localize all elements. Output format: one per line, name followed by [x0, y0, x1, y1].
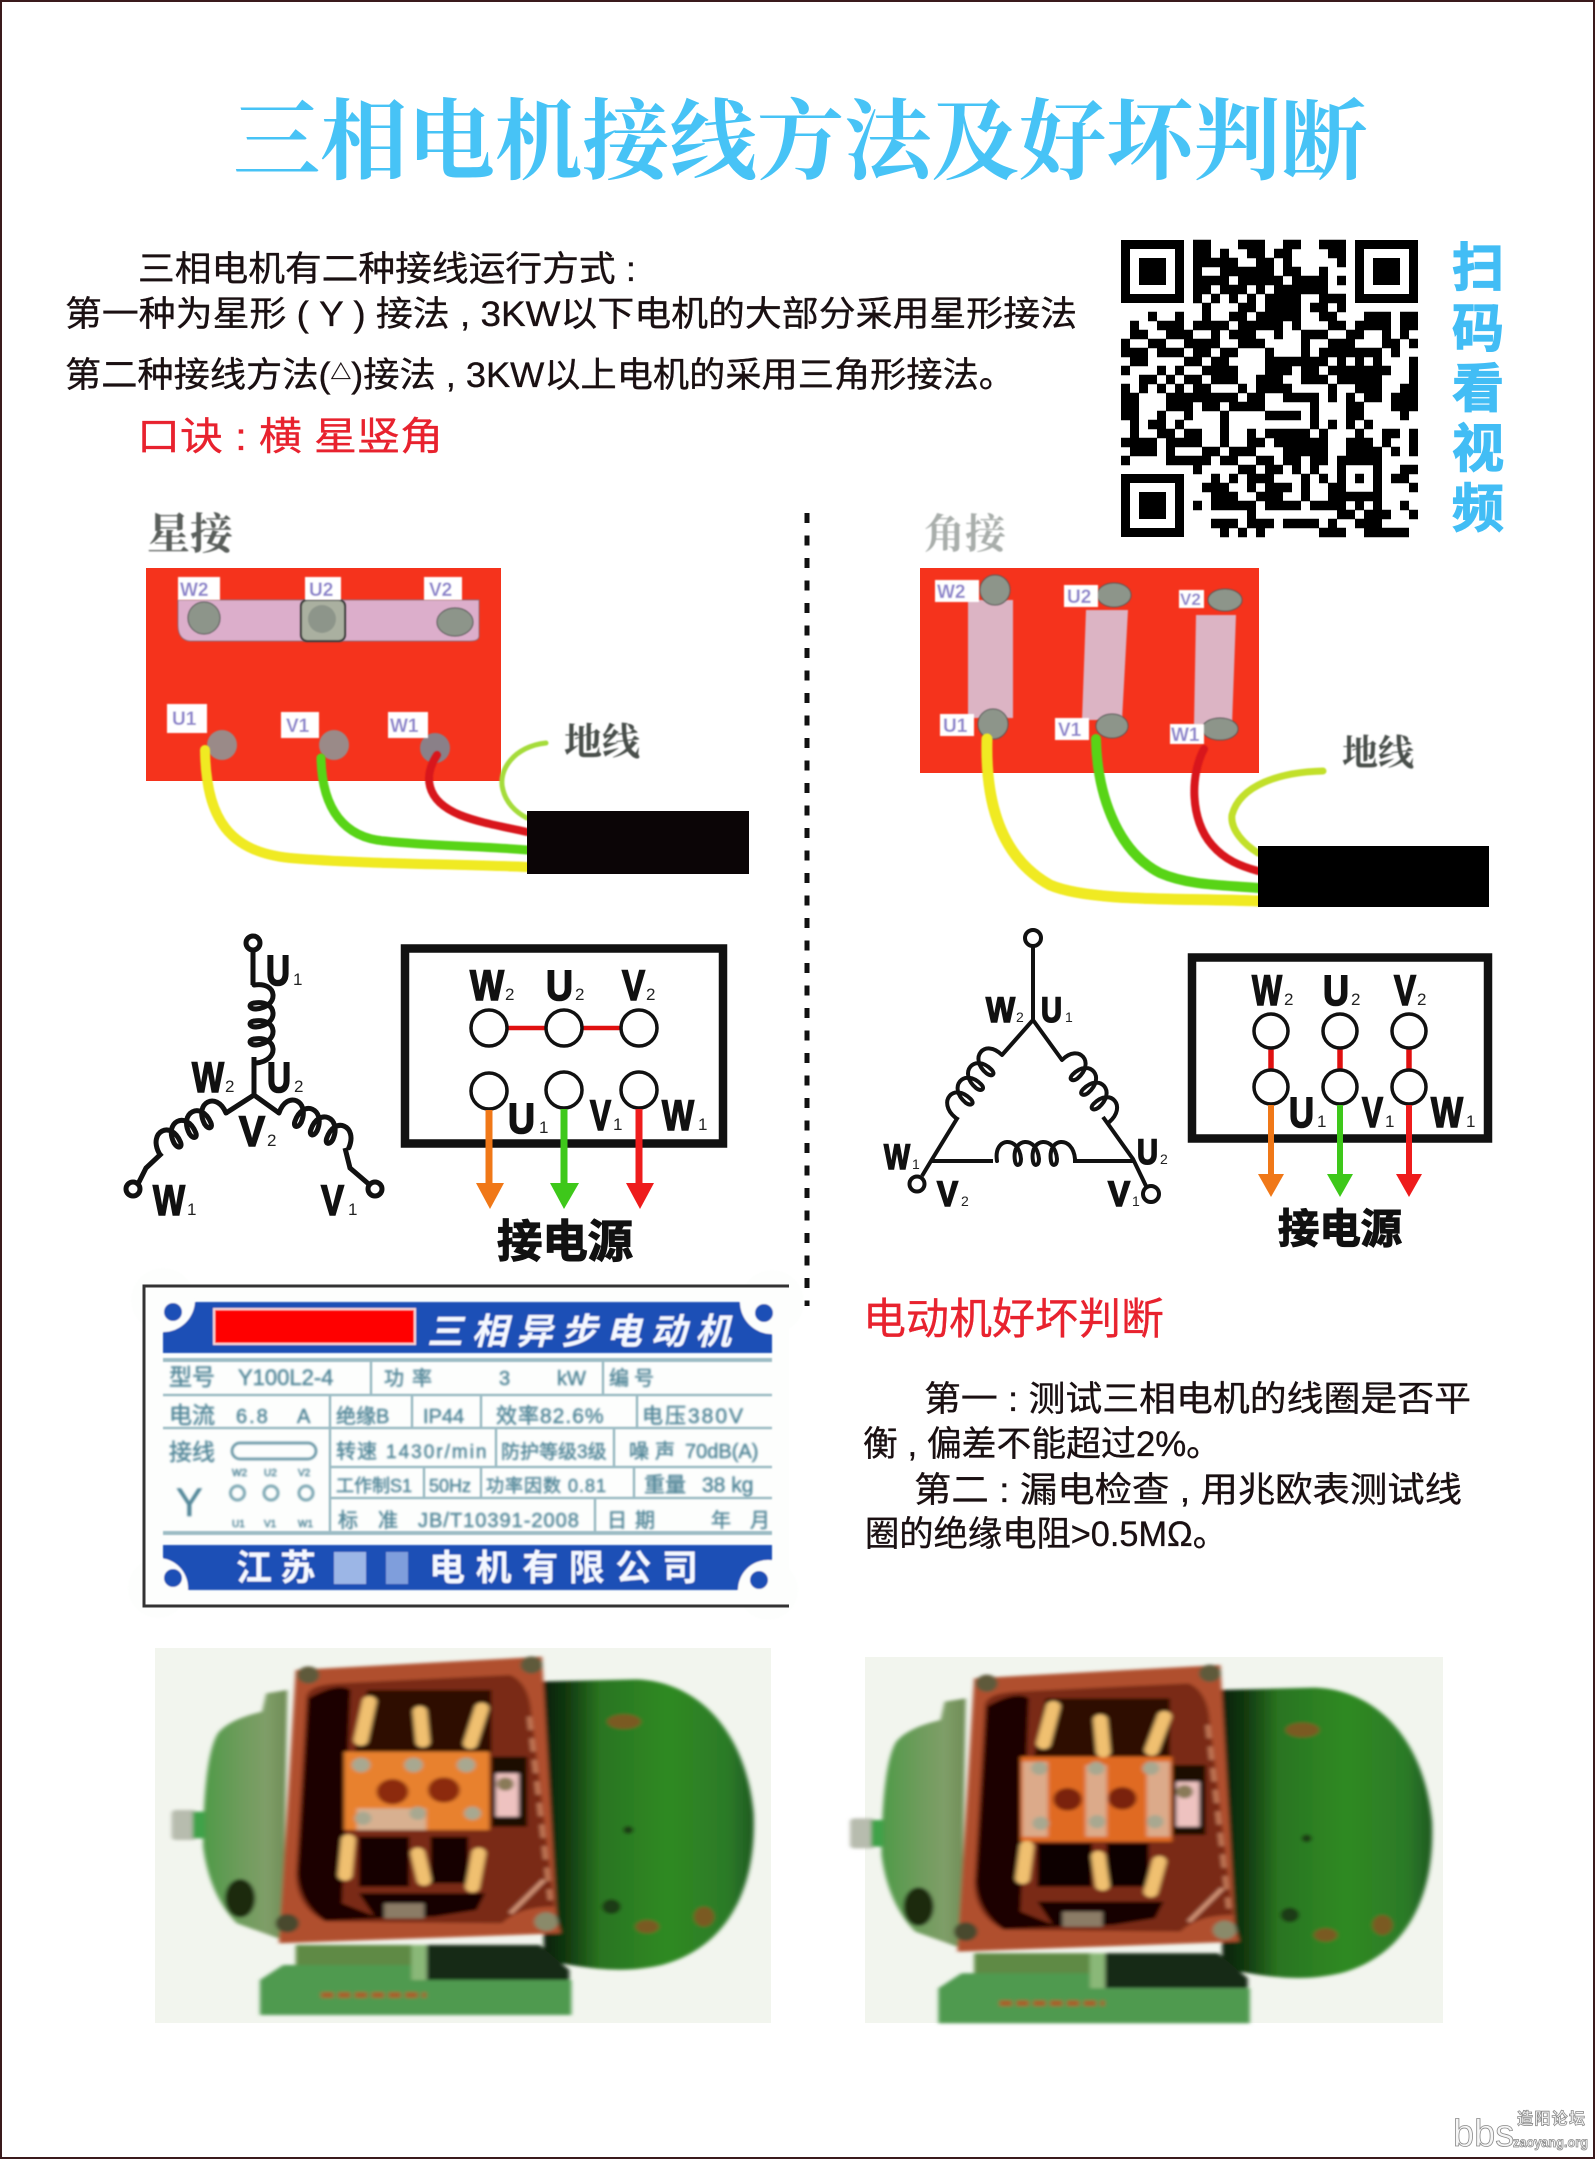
terminal tags: V1	[1058, 720, 1082, 741]
top blue band: 三相异步电动机	[427, 1311, 733, 1352]
photo: motor star wired	[155, 1648, 771, 2023]
spec text: 70dB(A)	[685, 1441, 758, 1463]
terminal tags: V1	[286, 716, 310, 737]
star terminal box diagram	[405, 948, 723, 1267]
dashed divider	[804, 513, 810, 1306]
heading: delta: 角接	[924, 511, 1008, 557]
heading: motor check: 电动机好坏判断	[863, 1296, 1164, 1344]
star winding diagram: W	[192, 1054, 224, 1102]
spec text: 功率因数 0.81	[486, 1476, 607, 1496]
heading: star: 星接	[147, 511, 235, 559]
label: connect power: 接电源	[1278, 1206, 1402, 1252]
spec text: 接线	[169, 1439, 215, 1465]
star terminal box diagram: 2	[505, 985, 514, 1004]
scan prompt vertical text: 频	[1452, 481, 1504, 539]
watermark: zaoyang.org	[1513, 2134, 1588, 2150]
spec text: V2	[298, 1468, 311, 1479]
star terminal box diagram: 1	[613, 1115, 622, 1134]
spec grid	[163, 1360, 772, 1533]
spec text: Y100L2-4	[238, 1365, 333, 1390]
terminal tags: U2	[1067, 587, 1091, 608]
terminal board	[920, 568, 1259, 773]
delta winding diagram: U	[1041, 991, 1062, 1030]
delta winding diagram: 1	[1132, 1193, 1140, 1209]
spec text: Y	[176, 1481, 203, 1525]
delta winding diagram: V	[1108, 1175, 1131, 1214]
spec text: 型号	[169, 1364, 215, 1390]
cable	[527, 811, 749, 874]
star winding diagram: 1	[187, 1200, 196, 1219]
terminal tags: W2	[180, 580, 208, 601]
spec text: W1	[298, 1519, 313, 1530]
motor check text block: 圈的绝缘电阻>0.5MΩ。	[865, 1515, 1227, 1554]
star winding diagram: 1	[348, 1200, 357, 1219]
power arrows	[1258, 1105, 1422, 1197]
spec text: 编号	[609, 1367, 659, 1390]
scan prompt vertical text: 扫	[1452, 240, 1504, 298]
top blue band	[131, 1268, 804, 1353]
watermark	[1453, 2109, 1588, 2155]
spec text: 日期	[607, 1510, 663, 1532]
star terminal box diagram: U	[546, 962, 573, 1010]
spec text: 1430r/min	[386, 1442, 488, 1463]
delta winding diagram: W	[986, 991, 1015, 1030]
spec text: 50Hz	[429, 1476, 471, 1496]
motor check text block: 第一 : 测试三相电机的线圈是否平	[924, 1380, 1471, 1419]
star winding diagram: W	[153, 1177, 185, 1225]
terminal tags: V2	[1180, 590, 1201, 609]
delta terminal box diagram: 1	[1466, 1112, 1475, 1131]
terminal tags: U1	[943, 716, 968, 737]
wires	[987, 739, 1323, 901]
delta terminal box diagram: V	[1362, 1089, 1383, 1137]
delta terminal box diagram	[1192, 958, 1488, 1252]
delta terminal box diagram: 1	[1317, 1112, 1326, 1131]
motor check text block	[863, 1380, 1471, 1554]
mnemonic: 口诀 : 横 星竖角	[137, 416, 443, 459]
spec text: 年	[711, 1509, 731, 1532]
wires	[205, 743, 546, 867]
star terminal box diagram: V	[590, 1092, 611, 1140]
star terminal box diagram: 2	[575, 985, 584, 1004]
cable	[1258, 846, 1489, 907]
delta terminal box diagram: 1	[1385, 1112, 1394, 1131]
delta winding diagram: 1	[1065, 1009, 1073, 1025]
spec text: 工作制S1	[336, 1476, 412, 1496]
scan prompt vertical text: 视	[1452, 421, 1504, 479]
terminal tags: U1	[172, 709, 197, 730]
delta terminal box diagram: 2	[1351, 990, 1360, 1009]
delta winding diagram: U	[1137, 1133, 1158, 1172]
plate frame	[144, 1286, 789, 1606]
delta terminal box diagram: U	[1323, 967, 1349, 1015]
spec text: 38 kg	[702, 1474, 753, 1497]
bottom blue band	[128, 1545, 798, 1620]
spec text: 电流	[169, 1402, 215, 1428]
intro text block: △	[331, 361, 351, 384]
spec text: 电压380V	[642, 1405, 745, 1428]
spec text: 3	[499, 1368, 510, 1390]
spec text: U1	[232, 1519, 245, 1530]
power arrows	[476, 1109, 654, 1209]
star terminal box diagram: U	[508, 1095, 535, 1143]
star winding diagram: 1	[293, 970, 302, 989]
photo: motor delta wired	[850, 1657, 1443, 2023]
delta terminal box diagram: U	[1289, 1089, 1314, 1137]
spec text: U2	[264, 1468, 277, 1479]
terminal tags: U2	[309, 580, 333, 601]
spec text	[169, 1364, 770, 1532]
bottom blue band: 江苏	[236, 1547, 316, 1588]
spec text: 噪声	[629, 1440, 681, 1463]
star terminal box diagram: 1	[698, 1115, 707, 1134]
star winding diagram: U	[266, 947, 290, 995]
star winding diagram: V	[239, 1108, 265, 1156]
link bar	[178, 600, 479, 641]
terminal tags	[935, 580, 1204, 746]
delta winding diagram: W	[884, 1138, 910, 1177]
terminal screws	[978, 575, 1242, 740]
panel: delta connection photo	[920, 511, 1489, 907]
intro text block: 第一种为星形 ( Y ) 接法 , 3KW以下电机的大部分采用星形接法	[65, 295, 1077, 334]
terminal tags: W2	[937, 582, 966, 603]
delta winding diagram: V	[937, 1175, 959, 1214]
spec text: 效率82.6%	[496, 1405, 605, 1428]
scan prompt vertical text: 码	[1452, 301, 1504, 359]
spec text: 绝缘B	[336, 1405, 389, 1428]
motor check text block: 第二 : 漏电检查 , 用兆欧表测试线	[914, 1471, 1462, 1510]
link bars	[968, 600, 1236, 725]
delta winding diagram	[884, 930, 1168, 1214]
label: ground: 地线	[1342, 733, 1414, 773]
label: connect power: 接电源	[497, 1216, 633, 1267]
terminal tags: W1	[1171, 725, 1200, 746]
star winding diagram: 2	[225, 1077, 234, 1096]
title: 三相电机接线方法及好坏判断	[233, 95, 1368, 192]
spec text: A	[297, 1406, 311, 1428]
delta terminal box diagram: V	[1394, 967, 1416, 1015]
terminal tags: V2	[429, 580, 452, 601]
intro text block: 三相电机有二种接线运行方式 :	[138, 250, 636, 289]
delta terminal box diagram: W	[1252, 967, 1282, 1015]
spec text: W2	[232, 1468, 247, 1479]
scan prompt vertical text	[1452, 240, 1504, 539]
star winding diagram: 2	[267, 1131, 276, 1150]
spec text: 6.8	[236, 1406, 270, 1428]
spec text: 功率	[384, 1367, 440, 1390]
star winding diagram	[126, 936, 382, 1225]
label: ground: 地线	[564, 722, 640, 764]
star terminal box diagram: 2	[646, 985, 655, 1004]
spec text: 转速	[336, 1440, 378, 1463]
spec text: 标准	[338, 1509, 418, 1532]
star terminal box diagram: W	[662, 1092, 694, 1140]
panel: star connection photo	[146, 511, 749, 874]
star winding diagram: U	[267, 1054, 291, 1102]
delta winding diagram: 2	[1016, 1009, 1024, 1025]
spec text: JB/T10391-2008	[418, 1510, 580, 1532]
spec text: 防护等级3级	[501, 1441, 607, 1463]
spec text: V1	[264, 1519, 277, 1530]
spec text: 重量	[644, 1474, 686, 1497]
terminal screws	[188, 600, 473, 763]
motor check text block: 衡 , 偏差不能超过2%。	[863, 1425, 1221, 1464]
terminal board	[146, 568, 501, 781]
delta winding diagram: 2	[961, 1193, 969, 1209]
watermark: bbs	[1453, 2113, 1514, 2155]
nameplate	[128, 1268, 804, 1620]
delta terminal box diagram: W	[1431, 1089, 1463, 1137]
intro text block: )接法 , 3KW以上电机的采用三角形接法。	[351, 356, 1015, 395]
intro text block	[65, 250, 1077, 395]
star winding diagram: 2	[294, 1077, 303, 1096]
spec text: IP44	[423, 1406, 464, 1428]
scan prompt vertical text: 看	[1452, 361, 1504, 419]
spec text: kW	[557, 1368, 586, 1390]
delta winding diagram: 2	[1160, 1151, 1168, 1167]
star terminal box diagram: V	[622, 962, 645, 1010]
bottom blue band: 电机有限公司	[429, 1547, 698, 1588]
delta winding diagram: 1	[912, 1156, 920, 1172]
terminal tags	[167, 577, 462, 738]
star winding diagram: V	[321, 1177, 344, 1225]
delta terminal box diagram: 2	[1417, 990, 1426, 1009]
intro text block: 第二种接线方法(	[65, 356, 322, 395]
watermark: 造阳论坛	[1517, 2109, 1585, 2128]
terminal tags: W1	[390, 716, 419, 737]
star terminal box diagram: W	[470, 962, 504, 1010]
QR code	[1121, 240, 1418, 537]
delta terminal box diagram: 2	[1284, 990, 1293, 1009]
star terminal box diagram: 1	[539, 1118, 548, 1137]
spec text: 月	[750, 1510, 770, 1532]
